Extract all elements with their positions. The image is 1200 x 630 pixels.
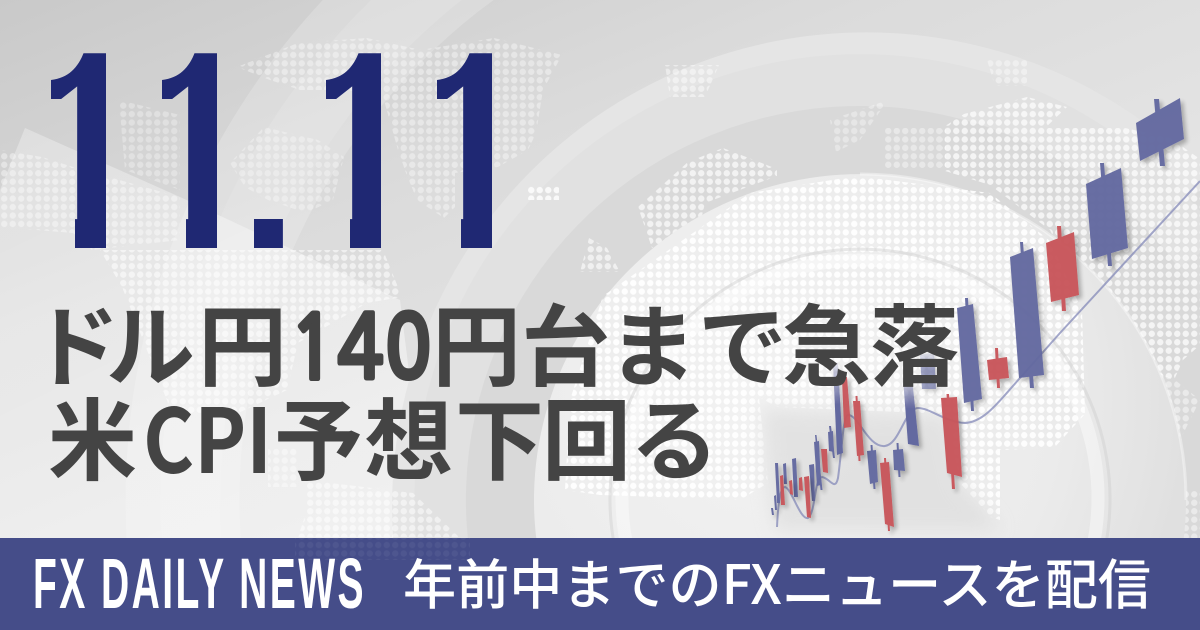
line two: CPI	[143, 370, 272, 499]
headline	[31, 276, 959, 499]
line one: 台	[521, 276, 610, 405]
candlestick chart	[771, 98, 1200, 531]
map dots: globe landmass	[565, 176, 1085, 520]
line one: ル	[106, 276, 195, 405]
line one: 円	[198, 276, 287, 405]
line one	[31, 276, 959, 405]
line one: 落	[870, 276, 959, 405]
map dots: outer landmasses	[0, 38, 1200, 538]
line one: 円	[432, 276, 521, 405]
fading blue candles	[833, 352, 936, 455]
date: .	[239, 58, 297, 293]
globe inner ring	[610, 174, 1186, 630]
date: 1	[411, 0, 535, 309]
line two: 予	[274, 370, 363, 499]
date: 1	[136, 0, 260, 309]
date	[51, 53, 492, 248]
line two: 米	[48, 370, 137, 499]
line two	[48, 370, 719, 499]
line one: 急	[782, 276, 871, 405]
line two: る	[630, 370, 719, 499]
date: 1	[25, 0, 149, 309]
brand label: FX DAILY NEWS	[33, 545, 366, 624]
line one: ド	[31, 276, 120, 405]
trend line	[777, 181, 1200, 527]
date: 1	[300, 0, 424, 309]
line two: 回	[542, 370, 631, 499]
line two: 下	[455, 370, 544, 499]
line one: で	[698, 276, 787, 405]
central land	[762, 404, 1000, 530]
line one: 140	[289, 305, 432, 393]
line one: ま	[608, 276, 697, 405]
line two: 想	[364, 370, 453, 499]
tagline: 年前中までのFXニュースを配信	[403, 541, 1151, 620]
blue candles	[771, 98, 1184, 515]
globe	[534, 174, 1186, 630]
footer band	[0, 538, 1200, 630]
red candles	[780, 226, 1079, 531]
